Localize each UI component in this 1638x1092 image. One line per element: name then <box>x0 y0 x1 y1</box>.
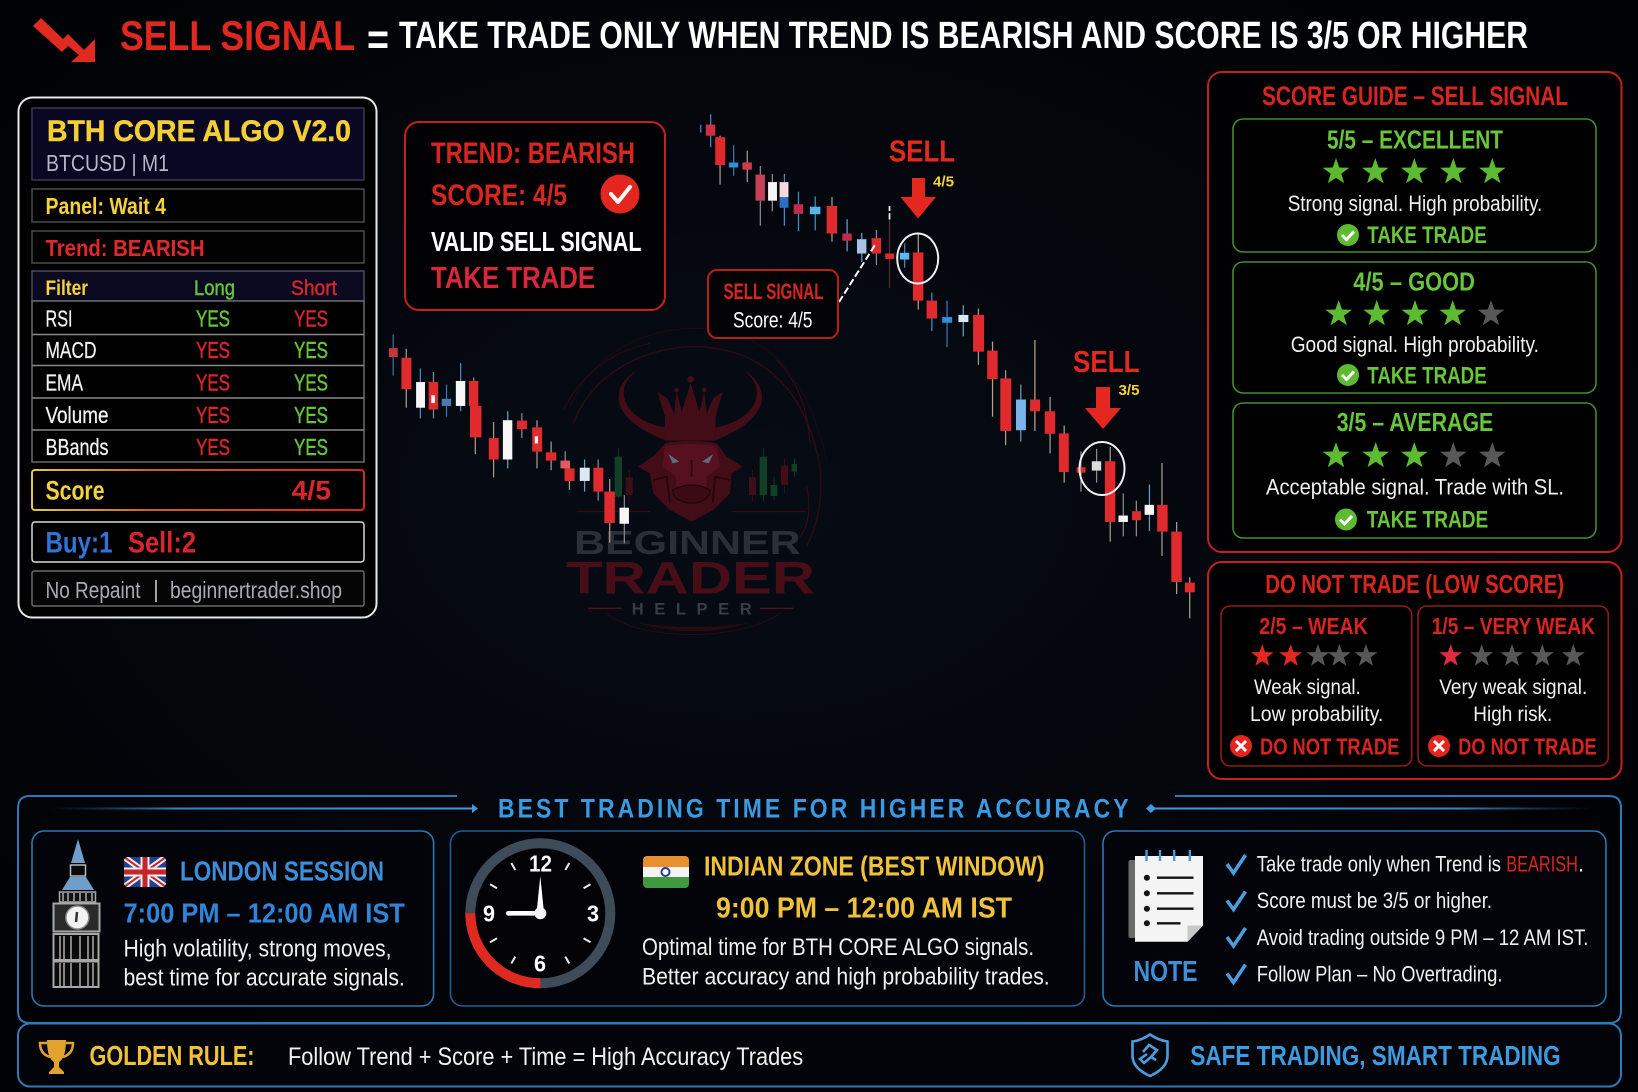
icon: trophy <box>40 1040 73 1074</box>
icon: shield <box>1132 1034 1168 1076</box>
card: note checklist <box>1103 831 1606 1006</box>
card: indian zone: INDIAN ZONE (BEST WINDOW) <box>704 850 1044 882</box>
panel: do not trade <box>1208 562 1622 779</box>
card: indian zone: Better accuracy and high probability trades. <box>642 963 1050 990</box>
card: 5/5 excellent: TAKE TRADE <box>1367 222 1487 249</box>
row: panel status: Panel: Wait 4 <box>46 193 166 219</box>
signal circle <box>1080 442 1124 495</box>
icon: clock: 3 <box>587 900 599 926</box>
sell signal 4/5 marker <box>889 134 955 284</box>
icon: india flag <box>643 856 689 888</box>
row: trend: Trend: BEARISH <box>46 235 204 261</box>
checklist: . <box>1578 852 1584 876</box>
chart: candlesticks upper right segment <box>700 114 1195 618</box>
heading: sell signal: SELL SIGNAL <box>120 12 355 59</box>
sell signal 4/5 marker: SELL <box>889 134 955 168</box>
icon: clock: 6 <box>534 950 546 976</box>
icon: clock: 12 <box>529 850 552 876</box>
callout: trend and score status: TAKE TRADE <box>431 260 595 295</box>
table: filters: Short <box>291 277 337 300</box>
card: 4/5 good <box>1233 262 1596 393</box>
callout: sell signal score: SELL SIGNAL <box>724 279 824 304</box>
signal circle <box>897 234 938 284</box>
card: 4/5 good: TAKE TRADE <box>1367 362 1487 390</box>
table: filters: YES <box>196 370 230 396</box>
panel title block: BTH CORE ALGO V2.0 <box>47 115 351 148</box>
icon: falling red arrow <box>33 18 95 62</box>
card: 1/5 very weak <box>1418 606 1608 766</box>
card: london session: High volatility, strong moves, <box>124 936 392 962</box>
row: footer note: beginnertrader.shop <box>170 577 342 603</box>
card: 1/5 very weak: High risk. <box>1473 703 1552 726</box>
card: 2/5 weak: Weak signal. <box>1254 676 1361 699</box>
callout: trend and score status: SCORE: 4/5 <box>431 179 567 212</box>
icon: clock: 9 <box>483 900 495 926</box>
checklist: Take trade only when Trend is <box>1257 852 1501 876</box>
card: 3/5 average: TAKE TRADE <box>1367 506 1488 534</box>
row: buy and sell counts: Buy:1 <box>46 526 112 560</box>
row: trend <box>32 231 364 263</box>
watermark: beginner trader helper logo: HELPER <box>632 600 752 618</box>
icon: red down arrow <box>900 178 936 218</box>
icon: big ben tower <box>54 839 100 987</box>
table: filters: BBands <box>46 434 108 460</box>
panel title block: BTCUSD | M1 <box>46 150 169 176</box>
icon: notepad <box>1128 850 1203 942</box>
sell signal 3/5 marker: 3/5 <box>1118 382 1140 399</box>
card: 2/5 weak <box>1221 606 1412 766</box>
heading: best trading time: BEST TRADING TIME FOR HIGHER ACCURACY <box>498 794 1129 824</box>
card: 4/5 good: Good signal. High probability. <box>1291 332 1539 357</box>
row: score: 4/5 <box>292 476 331 506</box>
row: footer note: No Repaint <box>46 577 141 603</box>
card: indian zone <box>450 831 1084 1006</box>
card: 3/5 average: Acceptable signal. Trade with SL. <box>1266 474 1564 499</box>
card: 1/5 very weak: Very weak signal. <box>1439 676 1587 699</box>
panel: score guide <box>1208 72 1622 552</box>
card: note checklist: NOTE <box>1134 956 1198 988</box>
row: buy and sell counts <box>32 522 364 562</box>
card: london session: LONDON SESSION <box>180 856 384 886</box>
card: 1/5 very weak: DO NOT TRADE <box>1458 734 1597 760</box>
panel: best trading time <box>18 794 1621 1023</box>
table: filters <box>32 271 364 462</box>
panel title block <box>32 108 364 180</box>
checklist: Follow Plan – No Overtrading. <box>1257 962 1502 986</box>
table: filters: YES <box>294 434 328 460</box>
header: sell signal rule <box>33 12 1528 64</box>
panel: golden rule: GOLDEN RULE: <box>90 1040 254 1071</box>
panel: golden rule: SAFE TRADING, SMART TRADING <box>1190 1040 1561 1071</box>
heading: best trading time <box>50 794 1593 824</box>
card: 4/5 good: 4/5 – GOOD <box>1353 266 1475 296</box>
card: 5/5 excellent: 5/5 – EXCELLENT <box>1327 124 1503 154</box>
card: 3/5 average <box>1233 403 1596 538</box>
table: filters: YES <box>196 434 230 460</box>
checklist <box>1227 852 1588 986</box>
heading: do not trade: DO NOT TRADE (LOW SCORE) <box>1265 569 1564 599</box>
callout: trend and score status <box>405 122 665 310</box>
watermark: beginner trader helper logo: BEGINNER <box>574 524 801 561</box>
callout: sell signal score: Score: 4/5 <box>733 308 812 332</box>
card: indian zone: 9:00 PM – 12:00 AM IST <box>716 892 1012 924</box>
panel: BTH core algo dashboard <box>18 98 376 618</box>
table: filters: Long <box>194 277 235 300</box>
table: filters: Volume <box>46 402 108 428</box>
table: filters: YES <box>196 337 230 363</box>
table: filters: Filter <box>46 277 88 300</box>
chart: candlesticks lower left segment <box>389 335 629 543</box>
card: london session <box>32 831 434 1006</box>
callout: trend and score status: TREND: BEARISH <box>431 137 635 170</box>
card: 2/5 weak: Low probability. <box>1250 703 1383 726</box>
icon: red down arrow <box>1085 387 1121 429</box>
table: filters: YES <box>196 306 230 332</box>
watermark: beginner trader helper logo: TRADER <box>566 552 815 603</box>
checklist: Score must be 3/5 or higher. <box>1257 888 1492 913</box>
table: filters: MACD <box>46 337 96 363</box>
row: footer note <box>32 571 364 606</box>
card: london session: 7:00 PM – 12:00 AM IST <box>124 898 405 928</box>
table: filters: YES <box>294 370 328 396</box>
panel: golden rule <box>18 1024 1621 1086</box>
icon: uk flag <box>124 857 166 887</box>
icon: red check badge <box>600 174 640 214</box>
row: score <box>32 470 364 510</box>
row: score: Score <box>46 476 104 506</box>
panel: golden rule: Follow Trend + Score + Time = High Accuracy Trades <box>288 1043 803 1071</box>
table: filters: EMA <box>46 370 83 396</box>
table: filters: YES <box>294 337 328 363</box>
row: buy and sell counts: Sell:2 <box>128 526 196 560</box>
card: indian zone: Optimal time for BTH CORE ALGO signals. <box>642 934 1034 961</box>
card: 3/5 average: 3/5 – AVERAGE <box>1337 407 1493 437</box>
card: 5/5 excellent: Strong signal. High probability. <box>1288 191 1542 216</box>
table: filters: YES <box>294 402 328 428</box>
card: 2/5 weak: DO NOT TRADE <box>1260 734 1399 760</box>
table: filters: YES <box>294 306 328 332</box>
icon: clock <box>470 843 610 983</box>
callout: sell signal score <box>708 245 875 338</box>
card: london session: best time for accurate signals. <box>124 964 405 992</box>
table: filters: YES <box>196 402 230 428</box>
sell signal 3/5 marker: SELL <box>1073 344 1140 379</box>
table: filters: RSI <box>46 306 72 332</box>
equals sign: = <box>367 15 389 64</box>
callout: trend and score status: VALID SELL SIGNAL <box>431 226 642 257</box>
card: 5/5 excellent <box>1233 119 1596 252</box>
watermark: beginner trader helper logo <box>563 328 827 635</box>
card: 1/5 very weak: 1/5 – VERY WEAK <box>1432 613 1595 639</box>
row: footer note: | <box>153 576 159 602</box>
sell signal 3/5 marker <box>1073 344 1140 495</box>
sell signal 4/5 marker: 4/5 <box>933 174 954 190</box>
card: 2/5 weak: 2/5 – WEAK <box>1259 613 1368 639</box>
row: panel status <box>32 189 364 222</box>
checklist: BEARISH <box>1506 852 1578 876</box>
